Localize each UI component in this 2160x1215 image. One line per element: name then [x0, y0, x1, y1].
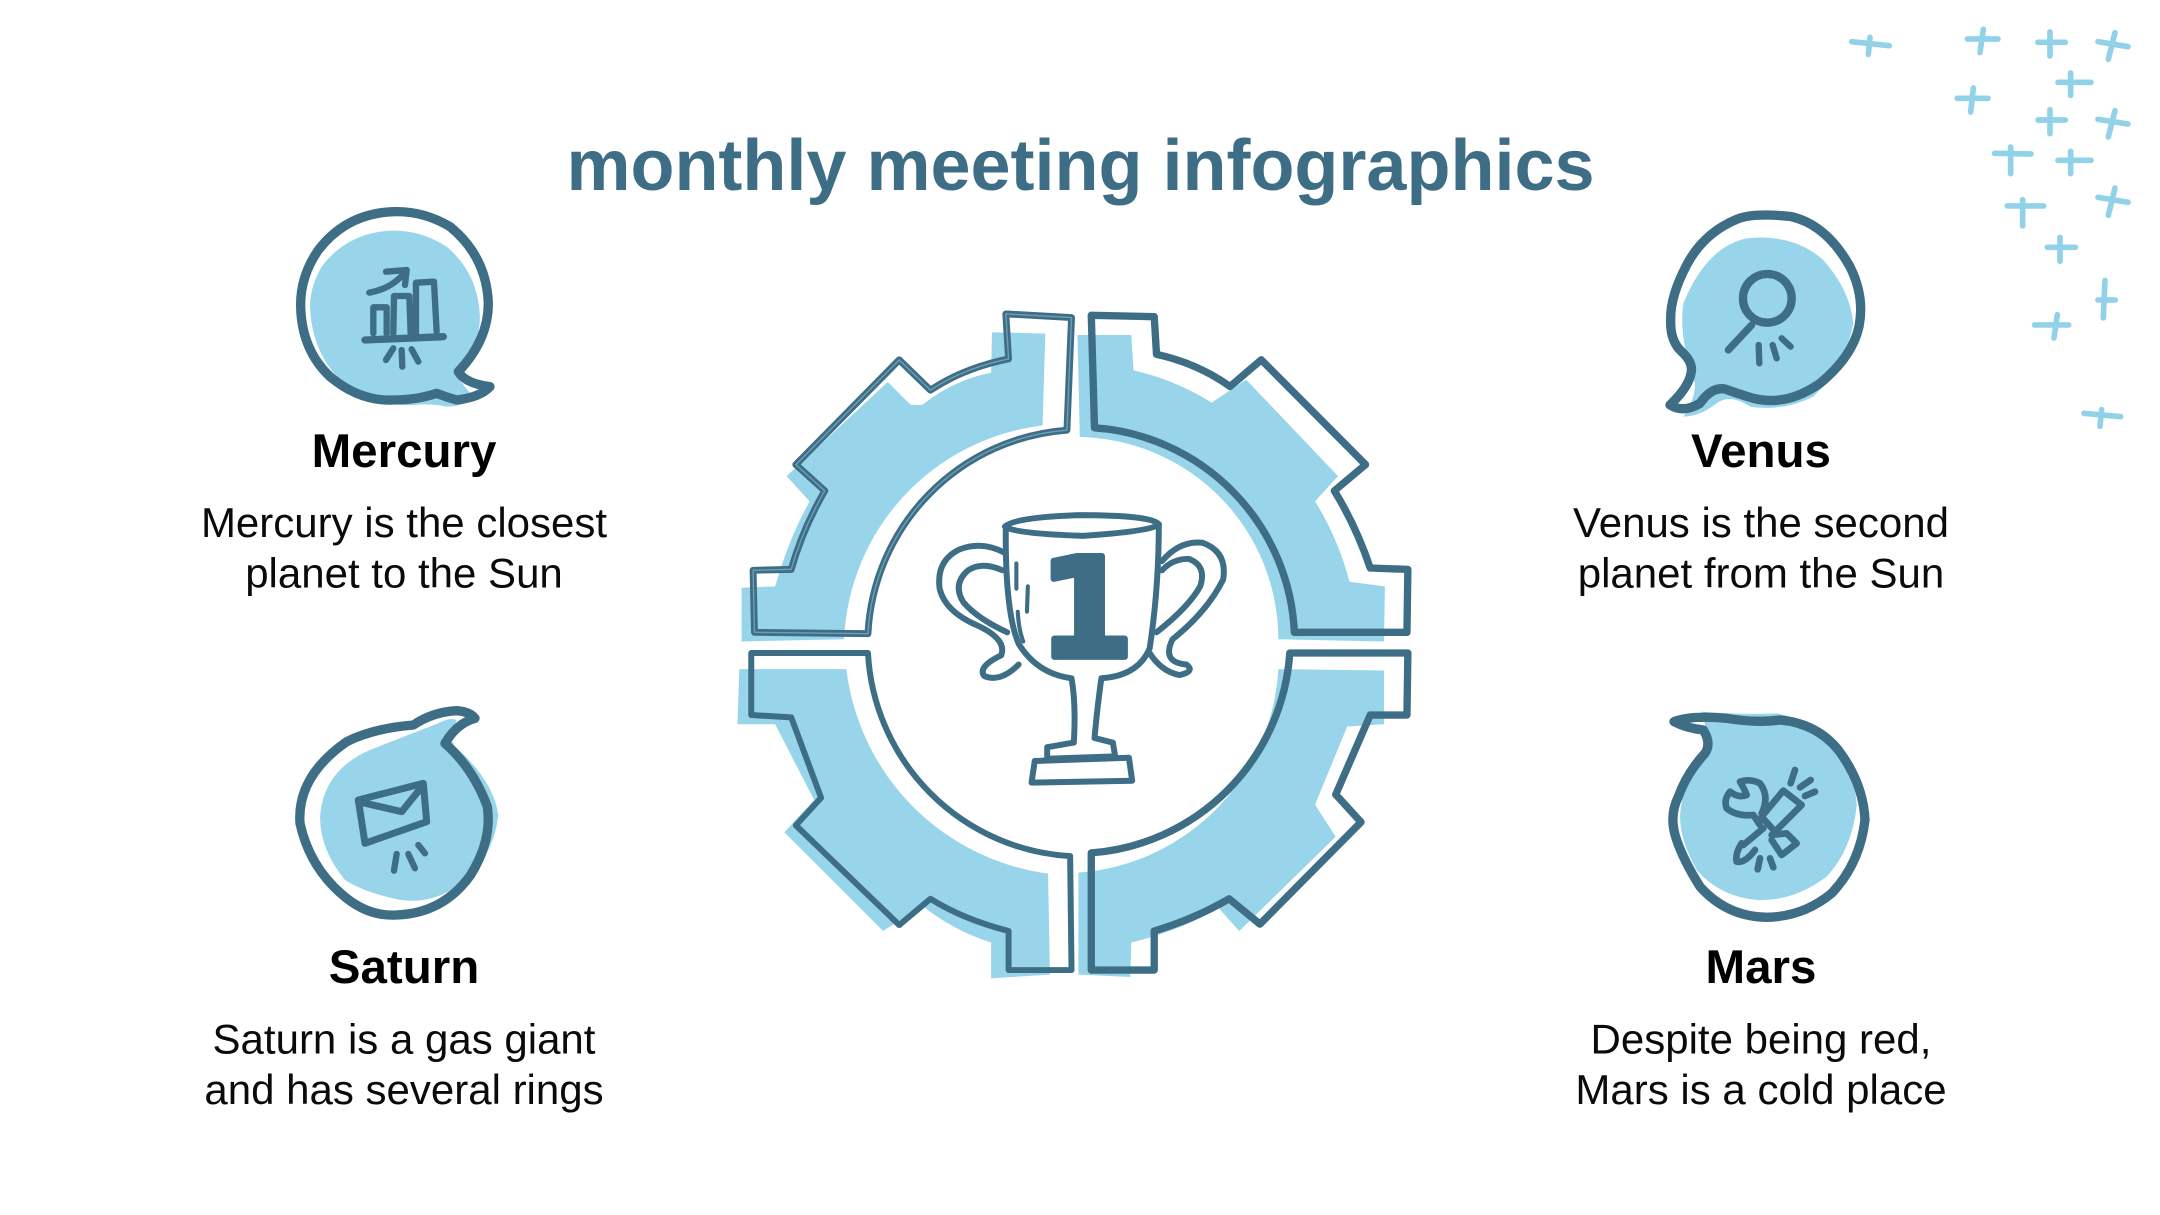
gear segment: top left [742, 314, 1072, 642]
icon: magnifier speech bubble [1670, 215, 1861, 417]
text: Venus description [1573, 499, 1949, 596]
text: Saturn description: and has several rings [204, 1066, 604, 1113]
icon: envelope speech bubble [300, 711, 498, 915]
gear segment: top right [1077, 315, 1408, 642]
heading: Venus: Venus [1691, 425, 1831, 478]
text: Saturn description [204, 1016, 604, 1113]
gear segment: bottom right [1078, 653, 1408, 977]
gear segment: bottom left [737, 653, 1072, 978]
panel: Mercury [201, 212, 607, 596]
icon: bar chart speech bubble [301, 212, 490, 407]
icon: tools speech bubble [1673, 712, 1865, 917]
decorative plus signs [1852, 29, 2128, 426]
heading: Saturn: Saturn [329, 941, 479, 994]
text: Mercury description: Mercury is the closest [201, 499, 607, 546]
text: Mars description: Despite being red, [1591, 1016, 1931, 1062]
text: Mars description [1575, 1016, 1947, 1113]
text: Saturn description: Saturn is a gas giant [213, 1016, 596, 1062]
panel: Mars [1575, 712, 1947, 1113]
gear with trophy [737, 314, 1408, 978]
panel: Venus [1573, 215, 1949, 596]
heading: Mars: Mars [1706, 941, 1816, 994]
title: monthly meeting infographics [566, 126, 1595, 206]
text: Venus description: planet from the Sun [1578, 550, 1944, 596]
heading: Mercury: Mercury [312, 425, 497, 478]
panel: Saturn [204, 711, 604, 1113]
trophy [939, 515, 1224, 783]
text: Mercury description [201, 499, 607, 596]
trophy number: 1 [1038, 529, 1134, 690]
text: Venus description: Venus is the second [1573, 499, 1949, 546]
text: Mars description: Mars is a cold place [1575, 1066, 1947, 1113]
text: Mercury description: planet to the Sun [245, 550, 563, 596]
